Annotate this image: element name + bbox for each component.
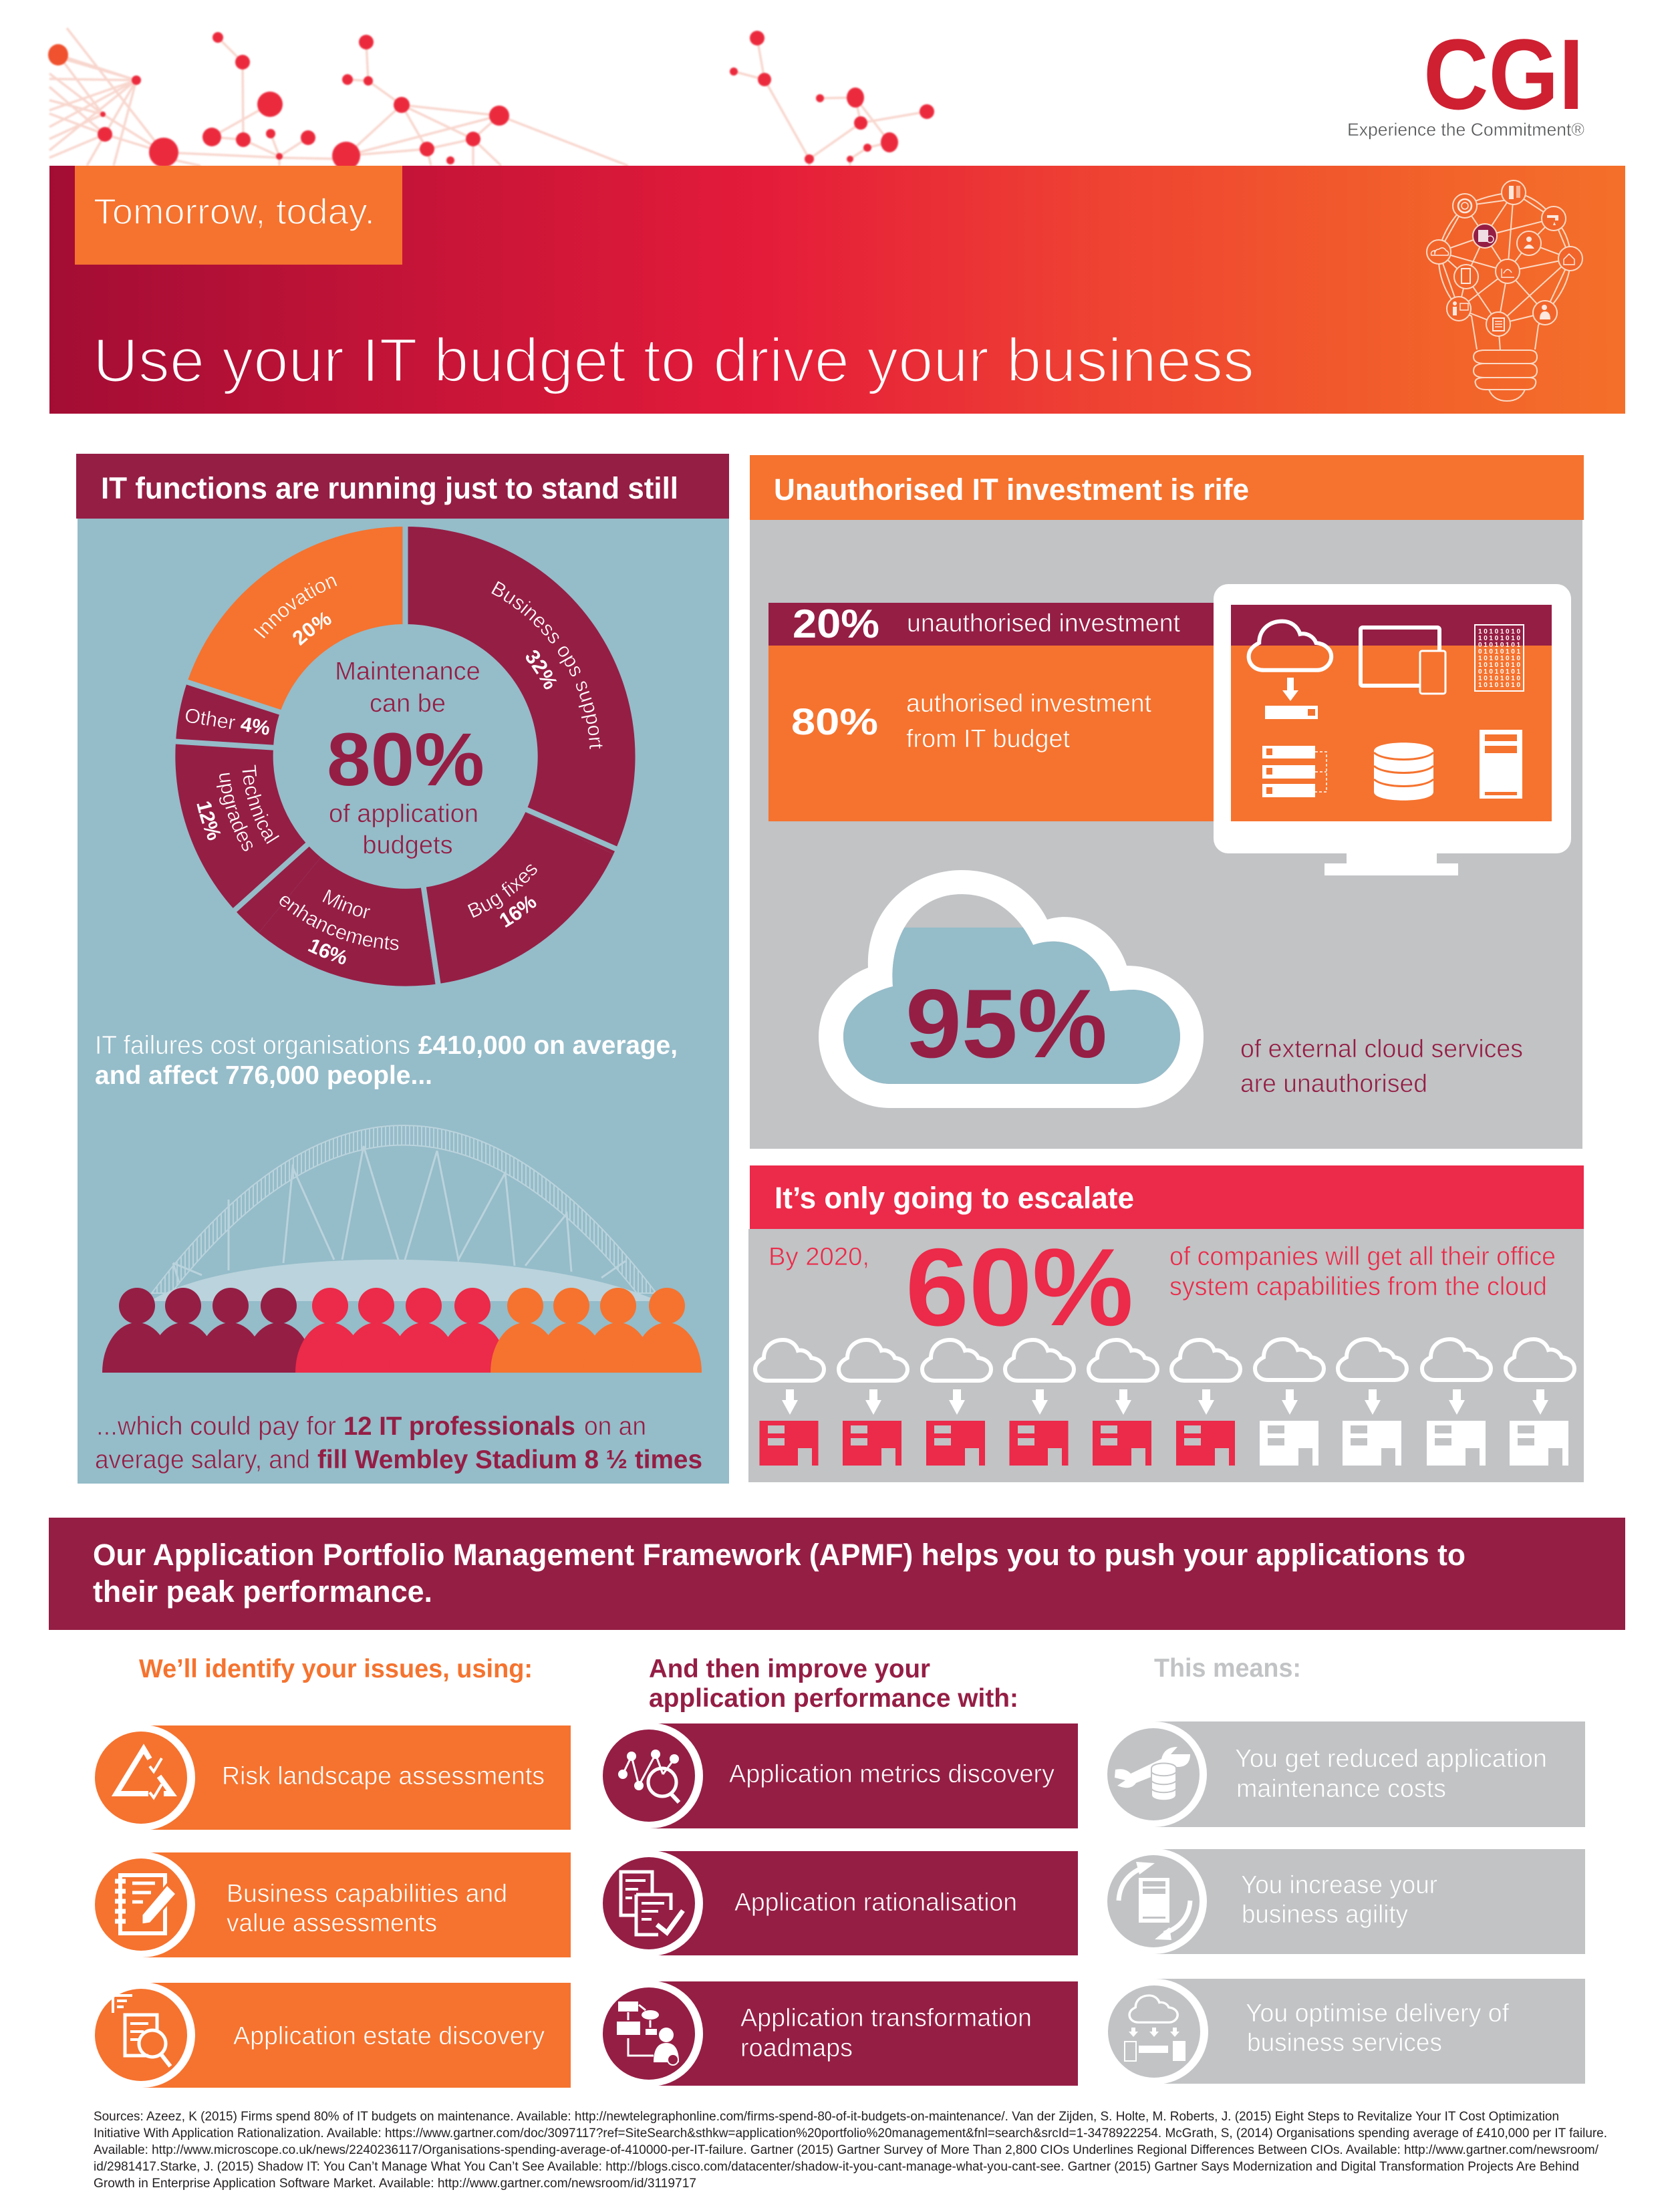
text: failures cost: IT failures cost organisations xyxy=(95,1031,410,1060)
header band xyxy=(49,166,1625,414)
text: failures cost: and affect 776,000 people... xyxy=(95,1061,432,1090)
panel heading xyxy=(750,1165,1584,1229)
icon: flow chart and person xyxy=(617,2001,679,2065)
donut centre text: of application xyxy=(329,800,478,828)
row: business capabilities: value assessments xyxy=(227,1909,437,1937)
row: transformation roadmaps xyxy=(597,1981,1078,2086)
icon: tower and cycle arrows xyxy=(1119,1862,1190,1940)
panel background xyxy=(78,519,729,1484)
icon: binary data: 10101010 xyxy=(1478,662,1520,669)
text: cloud services xyxy=(1240,1035,1523,1098)
row: business services xyxy=(1103,1979,1585,2084)
sources: Available: http://www.microscope.co.uk/news/2240236117/Organisations-spending-average-of-410000-per-IT-failure. Gartner (2015) Gartner Survey of More Than 2,800 CIOs Underlines Regional Differences Between CIOs. Available: http://www.gartner.com/newsroom/ xyxy=(94,2143,1599,2157)
column heading: improve xyxy=(649,1655,1018,1713)
CGI logo: CGI xyxy=(1423,18,1584,130)
panel heading xyxy=(750,455,1584,520)
CGI logo xyxy=(1347,18,1584,140)
row: application rationalisation: Application rationalisation xyxy=(734,1889,1017,1917)
donut labels: upgrades xyxy=(217,773,253,851)
icon: binary data: 01010101 xyxy=(1478,648,1520,656)
APMF banner xyxy=(49,1518,1625,1630)
icon: database xyxy=(1374,742,1433,801)
panel background xyxy=(750,520,1582,1149)
donut chart xyxy=(175,527,635,986)
icon row: arrows xyxy=(782,1389,1548,1415)
APMF banner: Our Application Portfolio Management Framework (APMF) helps you to push your applications to xyxy=(93,1538,1465,1572)
row: business capabilities xyxy=(90,1852,571,1957)
panel heading: IT functions are running just to stand still xyxy=(101,471,678,505)
CGI logo: Experience the Commitment® xyxy=(1347,120,1584,140)
icon: documents and tick xyxy=(621,1872,683,1935)
main title: Use your IT budget to drive your business xyxy=(93,325,1254,395)
tagline box: Tomorrow, today. xyxy=(94,192,375,232)
row: transformation roadmaps: roadmaps xyxy=(740,2034,853,2062)
investment split bar xyxy=(769,601,1223,821)
investment split bar: from IT budget xyxy=(906,725,1070,753)
donut labels: Minor xyxy=(322,889,370,918)
tagline box xyxy=(75,166,402,265)
investment split bar: authorised investment xyxy=(906,690,1151,718)
sources: Initiative With Application Rationalization. Available: https://www.gartner.com/doc/3097117?ref=SiteSearch&sthkw=application%20portfolio%20management&fnl=search&srcId=1-3478922254. McGrath, S, (2014) Organisations spending average of £410,000 per IT failure. xyxy=(94,2126,1607,2140)
donut labels: 12% xyxy=(196,801,221,841)
row: application estate xyxy=(90,1982,571,2088)
donut labels: 20% xyxy=(293,612,331,646)
text: pay for professionals: on an xyxy=(584,1412,646,1441)
investment split bar: 80% xyxy=(791,700,878,742)
APMF banner: their peak performance. xyxy=(93,1574,432,1609)
donut labels: Other 4% xyxy=(183,704,271,740)
column heading: improve: And then improve your xyxy=(649,1655,930,1683)
row: application rationalisation xyxy=(597,1850,1078,1956)
text: companies: of companies will get all their office xyxy=(1169,1242,1556,1271)
donut labels xyxy=(183,576,603,964)
sources: id/2981417.Starke, J. (2015) Shadow IT: You Can’t Manage What You Can’t See Available: http://blogs.cisco.com/datacenter/shadow-it-you-cant-manage-what-you-cant-see. Gartner (2015) Gartner Says Modernization and Digital Transformation Projects Are Behind xyxy=(94,2160,1579,2174)
icon: notepad and pencil xyxy=(115,1875,176,1933)
panel: IT functions xyxy=(76,454,729,1484)
text: companies: system capabilities from the cloud xyxy=(1169,1272,1547,1301)
icon row: buildings xyxy=(759,1421,1568,1466)
icon: binary data: 10101010 xyxy=(1478,655,1520,662)
donut centre text: Maintenance xyxy=(335,658,480,686)
icon: tower server xyxy=(1480,730,1522,799)
panel: escalate xyxy=(748,1165,1584,1482)
text: pay for professionals: fill Wembley Stadium 8 ½ times xyxy=(317,1445,702,1474)
row: transformation roadmaps: Application transformation xyxy=(740,2004,1032,2032)
icon: risk triangle xyxy=(116,1749,172,1798)
donut labels: Technical xyxy=(242,765,279,844)
row: risk landscape: Risk landscape assessments xyxy=(222,1762,545,1790)
donut centre text: budgets xyxy=(362,831,453,859)
row: application metrics: Application metrics discovery xyxy=(729,1760,1055,1788)
icon: documents and magnifier xyxy=(113,1995,170,2066)
icon: tablet and phone xyxy=(1361,628,1445,694)
donut centre text: 80% xyxy=(327,718,484,801)
donut labels: Business ops support xyxy=(491,581,603,750)
sources: Sources: Azeez, K (2015) Firms spend 80% of IT budgets on maintenance. Available: http://newtelegraphonline.com/firms-spend-80-of-it-budgets-on-maintenance/. Van der Zijden, S. Holte, M. Roberts, J. (2015) Eight Steps to Revitalize Your IT Cost Optimization xyxy=(94,2110,1559,2124)
row: reduced costs xyxy=(1101,1721,1585,1827)
column heading: this means: This means: xyxy=(1154,1654,1301,1683)
text: cloud services: are unauthorised xyxy=(1240,1070,1427,1098)
icon: binary data: 10101010 xyxy=(1478,635,1520,642)
donut labels: 32% xyxy=(526,650,557,690)
panel heading xyxy=(76,454,729,519)
row: reduced costs: You get reduced application xyxy=(1235,1745,1547,1773)
donut labels: Bug fixes xyxy=(468,864,537,918)
donut centre text xyxy=(327,658,484,859)
icon: binary data xyxy=(1475,625,1524,691)
icon: binary data: 01010101 xyxy=(1478,668,1520,676)
panel: unauthorised investment xyxy=(750,455,1584,1149)
icon: Wembley stadium xyxy=(150,1125,658,1301)
icon: cloud to devices xyxy=(1125,1995,1185,2061)
donut labels: Innovation xyxy=(254,576,337,639)
text: failures cost: £410,000 on average, xyxy=(418,1031,678,1060)
text: pay for professionals: average salary, and xyxy=(95,1445,310,1474)
icon: monitor xyxy=(1214,584,1571,875)
icon: binary data: 10101010 xyxy=(1478,675,1520,682)
row: application estate: Application estate discovery xyxy=(233,2022,545,2050)
sources: Growth in Enterprise Application Software Market. Available: http://www.gartner.com/newsroom/id/3119717 xyxy=(94,2177,696,2191)
icon: 95% cloud xyxy=(819,870,1204,1108)
icon: cloud to server xyxy=(1249,621,1331,719)
row: agility: You increase your xyxy=(1241,1871,1437,1899)
text: by 2020: By 2020, xyxy=(769,1243,869,1271)
row: business services: You optimise delivery of xyxy=(1246,1999,1509,2028)
icon: twelve people xyxy=(102,1288,702,1373)
row: agility xyxy=(1101,1848,1585,1954)
text: companies xyxy=(1169,1242,1556,1301)
icon: light bulb network xyxy=(1427,180,1582,401)
investment split bar: 20% xyxy=(793,601,879,646)
row: risk landscape xyxy=(90,1725,571,1830)
row: business capabilities: Business capabilities and xyxy=(227,1880,507,1908)
sources xyxy=(94,2110,1607,2191)
row: application metrics xyxy=(597,1723,1078,1828)
column heading: identify: We’ll identify your issues, using: xyxy=(139,1655,533,1683)
text: pay for professionals: 12 IT professionals xyxy=(343,1412,575,1441)
row: agility: business agility xyxy=(1242,1901,1408,1929)
icon: wrench and database xyxy=(1115,1747,1190,1800)
donut labels: enhancements xyxy=(279,895,398,950)
network decoration xyxy=(48,28,934,170)
donut labels: 16% xyxy=(307,940,346,964)
icon: server stack xyxy=(1262,746,1326,797)
icon: binary data: 01010101 xyxy=(1478,642,1520,649)
text: cloud services: of external cloud services xyxy=(1240,1035,1523,1063)
text: failures cost xyxy=(95,1031,678,1090)
row: reduced costs: maintenance costs xyxy=(1236,1775,1446,1803)
text: pay for professionals xyxy=(95,1412,702,1474)
icon: 95% cloud: 95% xyxy=(905,969,1107,1078)
column heading: improve: application performance with: xyxy=(649,1684,1018,1713)
investment split bar: unauthorised investment xyxy=(907,609,1180,638)
icon: binary data: 10101010 xyxy=(1478,628,1520,636)
donut centre text: can be xyxy=(370,690,446,718)
stat: 60%: 60% xyxy=(905,1226,1133,1349)
icon: metrics network xyxy=(618,1750,679,1802)
donut labels: 16% xyxy=(500,895,536,928)
icon: binary data: 10101010 xyxy=(1478,682,1520,689)
icon row: clouds xyxy=(755,1339,1574,1381)
panel heading: Unauthorised IT investment is rife xyxy=(774,472,1249,507)
text: pay for professionals: ...which could pay for xyxy=(96,1412,336,1441)
panel background xyxy=(748,1229,1584,1482)
panel heading: It’s only going to escalate xyxy=(775,1181,1134,1215)
row: business services: business services xyxy=(1247,2029,1442,2057)
